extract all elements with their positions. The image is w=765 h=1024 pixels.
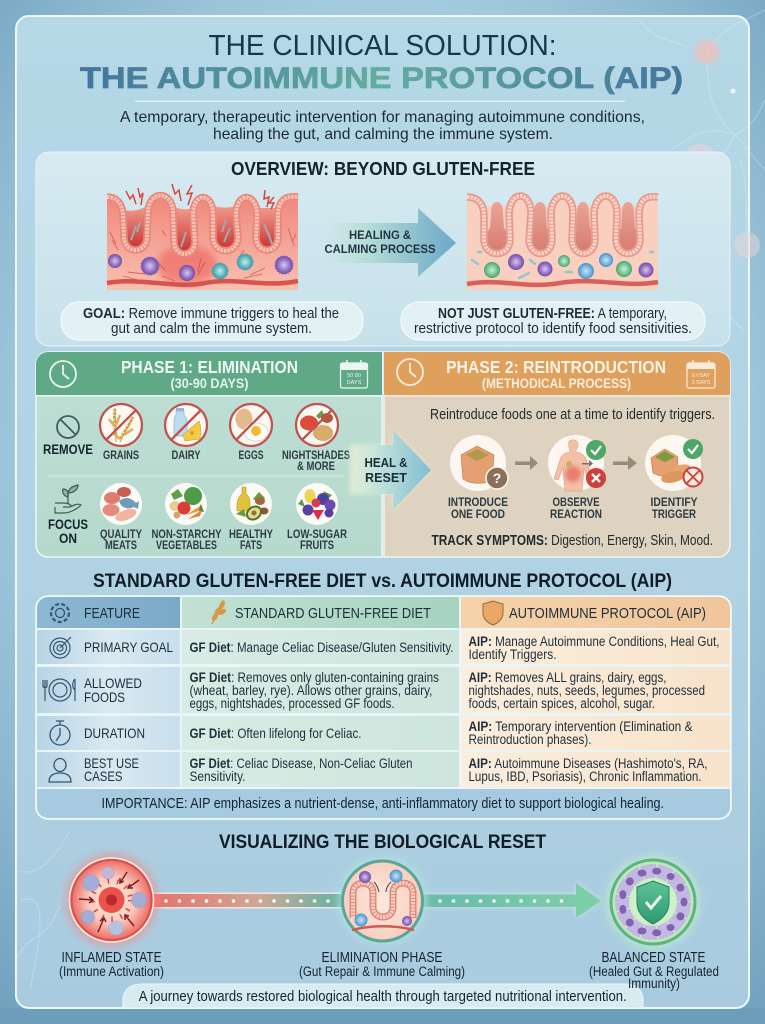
row: primary goal: Identify Triggers. [468,647,556,662]
panel: overview [36,152,730,346]
row: allowed foods: GF Diet: Removes only gluten-containing grains [190,670,439,685]
row: allowed foods [37,667,730,713]
row: allowed foods: (wheat, barley, rye). Allows other grains, dairy, [190,683,432,698]
phase 2 header: (METHODICAL PROCESS) [482,376,631,391]
phase 2 header [384,352,730,396]
label: healthy fats: HEALTHY [229,529,273,541]
row: best use cases: Lupus, IBD, Psoriasis), Chronic Inflammation. [468,769,702,784]
label: non-starchy vegetables [152,529,222,552]
phase 1 header: (30-90 DAYS) [170,376,248,391]
illustration: inflamed gut [107,184,298,290]
row: primary goal [37,630,730,664]
row: allowed foods: ALLOWED [84,675,142,691]
icon: hand with sprout [55,485,81,513]
subtitle: A temporary, therapeutic intervention for managing autoimmune conditions, [120,109,645,126]
timeline: biological reset [59,853,719,979]
step: observe reaction: OBSERVE [552,497,600,509]
table header row [37,597,730,628]
icon: inflamed state [59,853,164,979]
row: allowed foods: eggs, nightshades, processed GF foods. [190,696,394,711]
row: duration: GF Diet: Often lifelong for Celiac. [190,726,362,741]
step: introduce one food: ? [493,470,501,486]
label: balanced state: BALANCED STATE [602,950,706,966]
icon: shield [483,601,503,625]
arrow: heal and reset: RESET [365,470,407,485]
label: nightshades and more: NIGHTSHADES [282,450,350,462]
icon: low-sugar fruits [296,483,338,525]
arrow [515,456,538,470]
step: identify trigger: TRIGGER [652,509,697,521]
icon: healthy fats [230,483,272,525]
label: quality meats [100,529,142,552]
table header row: AUTOIMMUNE PROTOCOL (AIP) [509,606,706,622]
callout: not just gluten-free: restrictive protocol to identify food sensitivities. [414,321,692,337]
icon: plate and cutlery [43,679,75,701]
icon: wheat [211,599,227,624]
row: best use cases: AIP: Autoimmune Diseases (Hashimoto's, RA, [468,756,708,771]
row: duration: DURATION [84,725,145,741]
label: grains: GRAINS [103,450,139,462]
callout: goal [61,302,363,340]
phase 1 header [36,352,382,396]
icon: gear [51,604,69,622]
icon: stopwatch [50,721,70,745]
icon: no dairy [165,404,207,446]
table header row: FEATURE [84,606,140,622]
callout: not just gluten-free: NOT JUST GLUTEN-FREE: A temporary, [438,306,667,322]
label: balanced state [589,950,719,979]
icon: calendar: 3 SAYS [692,380,711,386]
label: low-sugar fruits [287,529,348,552]
row: duration [37,716,730,750]
row: primary goal: GF Diet: Manage Celiac Disease/Gluten Sensitivity. [190,640,454,655]
step: identify trigger: IDENTIFY [650,497,698,509]
icon: calendar: EVSAY [692,373,710,379]
label: nightshades and more [282,450,350,473]
icon: clock [50,361,76,387]
label: eggs: EGGS [238,450,264,462]
footer callout: A journey towards restored biological health through targeted nutritional intervention. [139,989,627,1005]
label: inflamed state: INFLAMED STATE [62,950,162,966]
icon: elimination phase [299,856,465,979]
icon: target [50,637,71,658]
row: duration: AIP: Temporary intervention (Elimination & [468,719,692,734]
panel: phase 1 elimination [36,352,382,557]
label: elimination phase: (Gut Repair & Immune Calming) [299,964,465,979]
remove row [43,404,350,473]
step: observe reaction [548,435,606,521]
label: quality meats: MEATS [105,540,137,552]
focus on row: FOCUS [48,517,88,532]
label: dairy: DAIRY [172,450,201,462]
label: healthy fats [229,529,273,552]
title: THE AUTOIMMUNE PROTOCOL (AIP) [80,62,683,95]
icon: no grains [100,404,142,446]
footer callout: Immunity) [628,976,680,991]
label: non-starchy vegetables: VEGETABLES [156,540,217,552]
row: best use cases [37,752,730,787]
table header row: STANDARD GLUTEN-FREE DIET [235,606,431,622]
arrow: heal and reset: HEAL & [364,455,408,470]
label: balanced state: (Healed Gut & Regulated [589,964,719,979]
icon: calendar [340,360,368,388]
progress bar [150,883,601,918]
row: primary goal: PRIMARY GOAL [84,639,173,655]
biological reset heading: VISUALIZING THE BIOLOGICAL RESET [219,832,546,853]
step: introduce one food: ONE FOOD [451,509,505,521]
callout: goal: GOAL: Remove immune triggers to heal the [83,306,339,322]
row: best use cases: GF Diet: Celiac Disease, Non-Celiac Gluten [190,756,412,771]
icon: calendar: 50 80 [347,373,361,379]
row: allowed foods: foods, certain spices, alcohol, sugar. [468,696,655,711]
icon: prohibited [57,416,79,438]
step: introduce one food: INTRODUCE [448,497,508,509]
icon: person [49,758,71,782]
title: THE CLINICAL SOLUTION: [208,30,556,62]
icon: calendar: DAYS [347,380,362,386]
arrow: heal and reset [346,430,431,510]
arrow: healing and calming process: CALMING PROCESS [324,242,436,256]
phase 2 intro: Reintroduce foods one at a time to identify triggers. [430,407,715,423]
title [80,30,683,102]
icon: clock [397,359,423,385]
icon: balanced state [589,855,719,979]
icon: non-starchy vegetables [165,483,207,525]
row: allowed foods: FOODS [84,689,125,705]
arrow [613,456,637,470]
label: quality meats: QUALITY [100,529,142,541]
row: allowed foods: AIP: Removes ALL grains, dairy, eggs, [468,670,666,685]
row: allowed foods: nightshades, nuts, seeds, legumes, processed [468,683,705,698]
panel: phase 2 reintroduction [384,352,730,557]
arrow: healing and calming process: HEALING & [349,228,411,242]
callout: not just gluten-free [401,302,705,340]
label: elimination phase [299,950,465,979]
subtitle [120,109,645,143]
step: introduce one food [448,435,508,521]
importance row: IMPORTANCE: AIP emphasizes a nutrient-dense, anti-inflammatory diet to support biological healing. [102,796,664,812]
row: best use cases: BEST USE [84,755,139,771]
subtitle: healing the gut, and calming the immune system. [213,126,553,143]
label: low-sugar fruits: FRUITS [300,540,334,552]
callout: goal: gut and calm the immune system. [111,321,312,337]
row: duration: Reintroduction phases). [468,732,592,747]
label: inflamed state [59,950,164,979]
overview heading: OVERVIEW: BEYOND GLUTEN-FREE [231,159,535,179]
row: best use cases: Sensitivity. [190,769,246,784]
step: observe reaction: REACTION [550,509,602,521]
arrow: healing and calming process [320,208,456,277]
remove row: REMOVE [43,442,93,457]
row: best use cases: CASES [84,768,122,784]
icon: no eggs [230,404,272,446]
focus on row [48,483,348,552]
label: low-sugar fruits: LOW-SUGAR [287,529,348,541]
icon: no nightshades [296,404,338,446]
icon: calendar [687,360,715,388]
label: nightshades and more: & MORE [297,461,335,473]
label: inflamed state: (Immune Activation) [59,964,164,979]
phase 2 header: PHASE 2: REINTRODUCTION [446,357,666,377]
step: identify trigger [645,435,703,521]
label: elimination phase: ELIMINATION PHASE [322,950,443,966]
label: healthy fats: FATS [240,540,262,552]
comparison table [36,596,731,819]
importance row [37,789,730,818]
phase 1 header: PHASE 1: ELIMINATION [121,357,298,377]
row: primary goal: AIP: Manage Autoimmune Conditions, Heal Gut, [468,634,720,649]
label: non-starchy vegetables: NON-STARCHY [152,529,222,541]
footer callout [123,976,680,1008]
illustration: healed gut [467,194,658,290]
focus on row: ON [59,531,77,546]
icon: quality meats [100,483,142,525]
comparison heading: STANDARD GLUTEN-FREE DIET vs. AUTOIMMUNE PROTOCOL (AIP) [93,571,672,592]
track symptoms: TRACK SYMPTOMS: Digestion, Energy, Skin, Mood. [432,533,713,549]
